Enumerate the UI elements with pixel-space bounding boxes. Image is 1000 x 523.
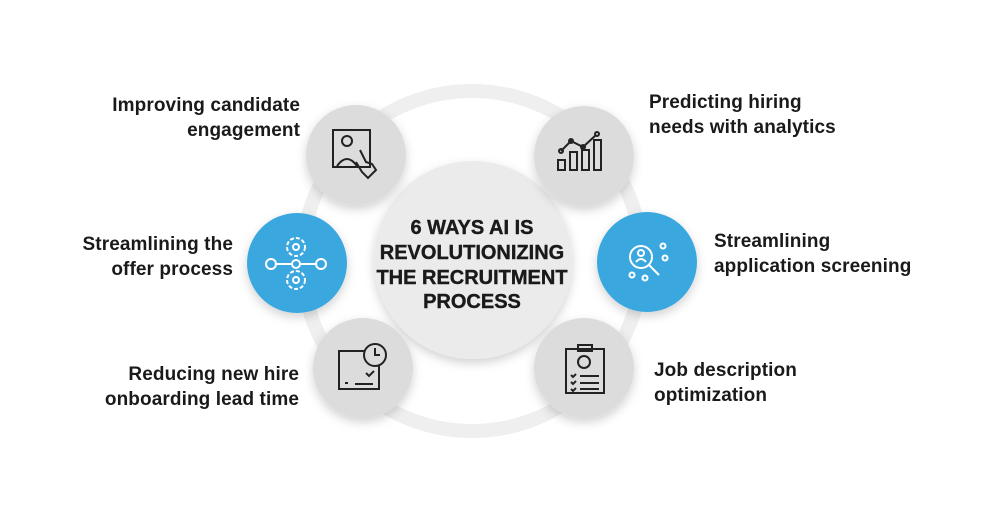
label: candidate engagement: engagement	[187, 120, 300, 141]
title: THE RECRUITMENT	[376, 267, 568, 289]
label: job description	[654, 360, 797, 406]
label: offer process	[83, 234, 233, 280]
label: onboarding: onboarding lead time	[105, 389, 299, 410]
center circle	[374, 161, 572, 359]
icon: bar chart	[558, 132, 601, 170]
title: PROCESS	[423, 291, 521, 313]
label: offer process: Streamlining the	[83, 234, 233, 255]
label: screening: application screening	[714, 256, 911, 277]
icon: touch screen person	[333, 130, 376, 178]
ring	[302, 91, 642, 431]
label: onboarding	[105, 364, 299, 410]
label: offer process: offer process	[111, 259, 233, 280]
label: analytics: Predicting hiring	[649, 92, 802, 113]
icon: box with clock	[339, 344, 386, 389]
icon: gears	[266, 238, 326, 289]
title	[376, 217, 568, 313]
circle: analytics	[534, 106, 634, 206]
circle: onboarding	[313, 318, 413, 418]
label: screening	[714, 231, 911, 277]
label: job description: optimization	[654, 385, 767, 406]
circle: job description	[534, 318, 634, 418]
circle: candidate engagement	[306, 105, 406, 205]
label: analytics: needs with analytics	[649, 117, 836, 138]
title: REVOLUTIONIZING	[380, 242, 564, 264]
circle: offer process (blue)	[247, 213, 347, 313]
title: 6 WAYS AI IS	[410, 217, 534, 239]
label: job description: Job description	[654, 360, 797, 381]
icon: magnifier people	[630, 244, 668, 280]
label: candidate engagement: Improving candidate	[112, 95, 300, 116]
label: screening: Streamlining	[714, 231, 830, 252]
label: candidate engagement	[112, 95, 300, 141]
circle: application screening (blue)	[597, 212, 697, 312]
label: onboarding: Reducing new hire	[128, 364, 299, 385]
icon: clipboard	[566, 345, 604, 393]
label: analytics	[649, 92, 836, 138]
